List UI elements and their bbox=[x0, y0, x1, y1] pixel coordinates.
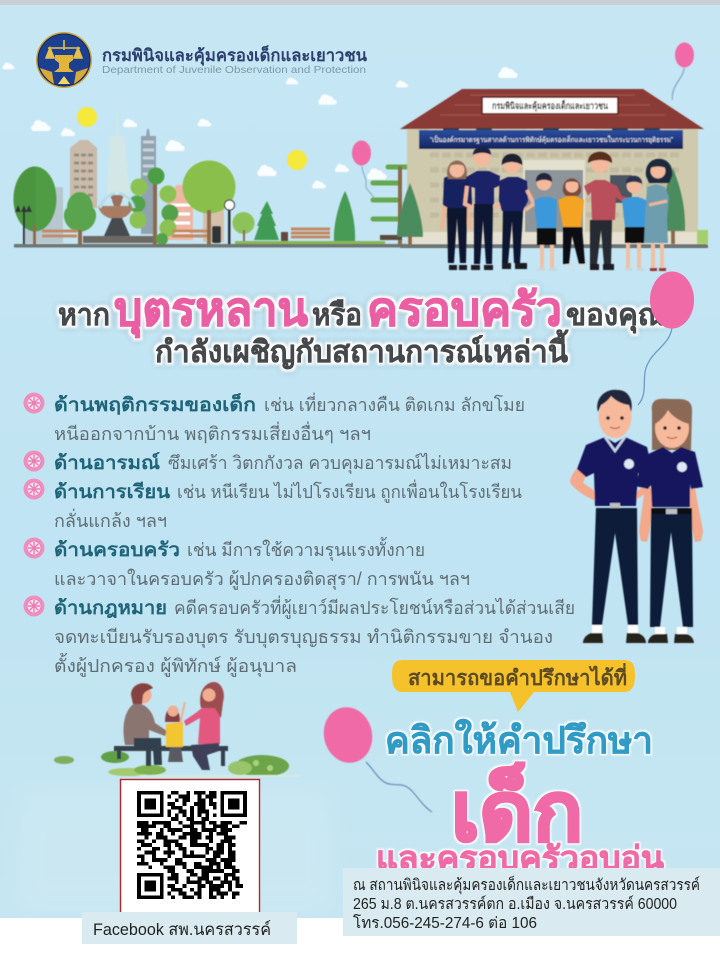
park scene illustration bbox=[13, 100, 707, 248]
bench bbox=[114, 746, 228, 766]
family on bench illustration bbox=[54, 682, 300, 777]
staff man one bbox=[465, 146, 502, 270]
father bbox=[123, 683, 167, 765]
trees bbox=[13, 160, 414, 245]
building bbox=[397, 89, 708, 248]
item: behaviour bbox=[24, 392, 525, 444]
address panel bbox=[343, 868, 720, 936]
man bbox=[570, 390, 652, 643]
item: family: ด้านครอบครัว bbox=[54, 539, 180, 561]
title: ของคุณ bbox=[566, 299, 665, 334]
item: law: จดทะเบียนรับรองบุตร รับบุตรบุญธรรม ทำนิติกรรมขาย จำนอง bbox=[54, 627, 553, 648]
man in red bbox=[584, 152, 648, 270]
callout bubble: สามารถขอคำปรึกษาได้ที่ bbox=[408, 662, 627, 690]
motto banner bbox=[419, 130, 683, 149]
facebook label bbox=[82, 912, 297, 944]
pink balloon bottom bbox=[318, 702, 432, 812]
clinic name bbox=[376, 718, 664, 879]
item: law: คดีครอบครัวที่ผู้เยาว์มีผลประโยชน์หรือส่วนได้ส่วนเสีย bbox=[174, 595, 575, 619]
item: study: เช่น หนีเรียน ไม่ไปโรงเรียน ถูกเพื่อนในโรงเรียน bbox=[177, 479, 522, 503]
title: กำลังเผชิญกับสถานการณ์เหล่านี้ bbox=[155, 329, 569, 370]
item: behaviour: เช่น เที่ยวกลางคืน ติดเกม ลักขโมย bbox=[264, 392, 525, 415]
staff woman bbox=[440, 160, 472, 270]
header text: กรมพินิจและคุ้มครองเด็กและเยาวชน bbox=[102, 44, 368, 66]
item: behaviour: หนีออกจากบ้าน พฤติกรรมเสี่ยงอื่นๆ ฯลฯ bbox=[54, 421, 371, 444]
header text: Department of Juvenile Observation and Protection bbox=[102, 64, 366, 76]
facebook label: Facebook สพ.นครสวรรค์ bbox=[93, 920, 271, 939]
QR code panel bbox=[120, 780, 260, 920]
item: family: เช่น มีการใช้ความรุนแรงทั้งกาย bbox=[187, 537, 425, 561]
boy in blue right bbox=[622, 176, 646, 271]
boy in blue bbox=[534, 173, 557, 271]
woman bbox=[635, 399, 703, 643]
clinic name: และครอบครัวอบอุ่น bbox=[376, 840, 664, 879]
QR code bbox=[137, 791, 247, 899]
fountain bbox=[83, 193, 153, 243]
item: family: และวาจาในครอบครัว ผู้ปกครองติดสุรา/ การพนัน ฯลฯ bbox=[54, 568, 470, 590]
item: family bbox=[24, 537, 470, 590]
building name sign bbox=[481, 96, 619, 115]
staff couple illustration bbox=[570, 390, 703, 643]
bushes bbox=[54, 751, 300, 777]
logo bbox=[36, 32, 92, 88]
situation list bbox=[24, 392, 575, 677]
item: law: ด้านกฎหมาย bbox=[54, 597, 167, 619]
building name sign: กรมพินิจและคุ้มครองเด็กและเยาวชน bbox=[492, 99, 608, 112]
clinic name: คลิกให้คำปรึกษา bbox=[385, 718, 653, 761]
title: หาก bbox=[58, 299, 110, 332]
item: law bbox=[24, 595, 575, 677]
clinic name: เด็ก bbox=[451, 762, 583, 858]
item: study: กลั่นแกล้ง ฯลฯ bbox=[54, 508, 167, 531]
sun left bbox=[77, 107, 97, 127]
child bbox=[165, 702, 185, 762]
city buildings bbox=[23, 100, 224, 243]
title: บุตรหลาน bbox=[114, 283, 309, 338]
item: study: ด้านการเรียน bbox=[54, 481, 170, 503]
top grey strip bbox=[0, 0, 720, 5]
sun right bbox=[287, 150, 307, 170]
ground line bbox=[14, 244, 707, 248]
clouds bbox=[2, 63, 518, 188]
staff man two bbox=[499, 154, 534, 269]
lower-left pale haze bbox=[20, 790, 330, 910]
mother bbox=[184, 682, 224, 770]
item: emotion: ซึมเศร้า วิตกกังวล ควบคุมอารมณ์ไม่เหมาะสม bbox=[168, 452, 512, 474]
address panel: 265 ม.8 ต.นครสวรรค์ตก อ.เมือง จ.นครสวรรค์ 60000 bbox=[353, 895, 677, 913]
item: study bbox=[24, 478, 522, 531]
large balloon bbox=[638, 272, 694, 405]
item: emotion: ด้านอารมณ์ bbox=[54, 452, 160, 474]
callout bubble bbox=[392, 660, 635, 712]
title: ครอบครัว bbox=[367, 283, 562, 335]
balloon mid bbox=[362, 166, 374, 198]
item: emotion bbox=[24, 450, 512, 474]
header text bbox=[102, 44, 368, 76]
address panel: โทร.056-245-274-6 ต่อ 106 bbox=[353, 914, 537, 932]
balloon top right bbox=[672, 42, 694, 100]
benches and lamps bbox=[15, 200, 402, 244]
girl in orange bbox=[558, 178, 586, 268]
title: หรือ bbox=[312, 299, 362, 332]
staff and family group bbox=[440, 146, 672, 271]
item: law: ตั้งผู้ปกครอง ผู้พิทักษ์ ผู้อนุบาล bbox=[54, 653, 297, 677]
mother in dress bbox=[644, 159, 672, 271]
title bbox=[58, 283, 665, 370]
item: behaviour: ด้านพฤติกรรมของเด็ก bbox=[54, 392, 256, 416]
motto banner: “เป็นองค์กรมาตรฐานสากลด้านการพิทักษ์คุ้มครองเด็กและเยาวชนในกระบวนการยุติธรรม” bbox=[430, 135, 674, 144]
